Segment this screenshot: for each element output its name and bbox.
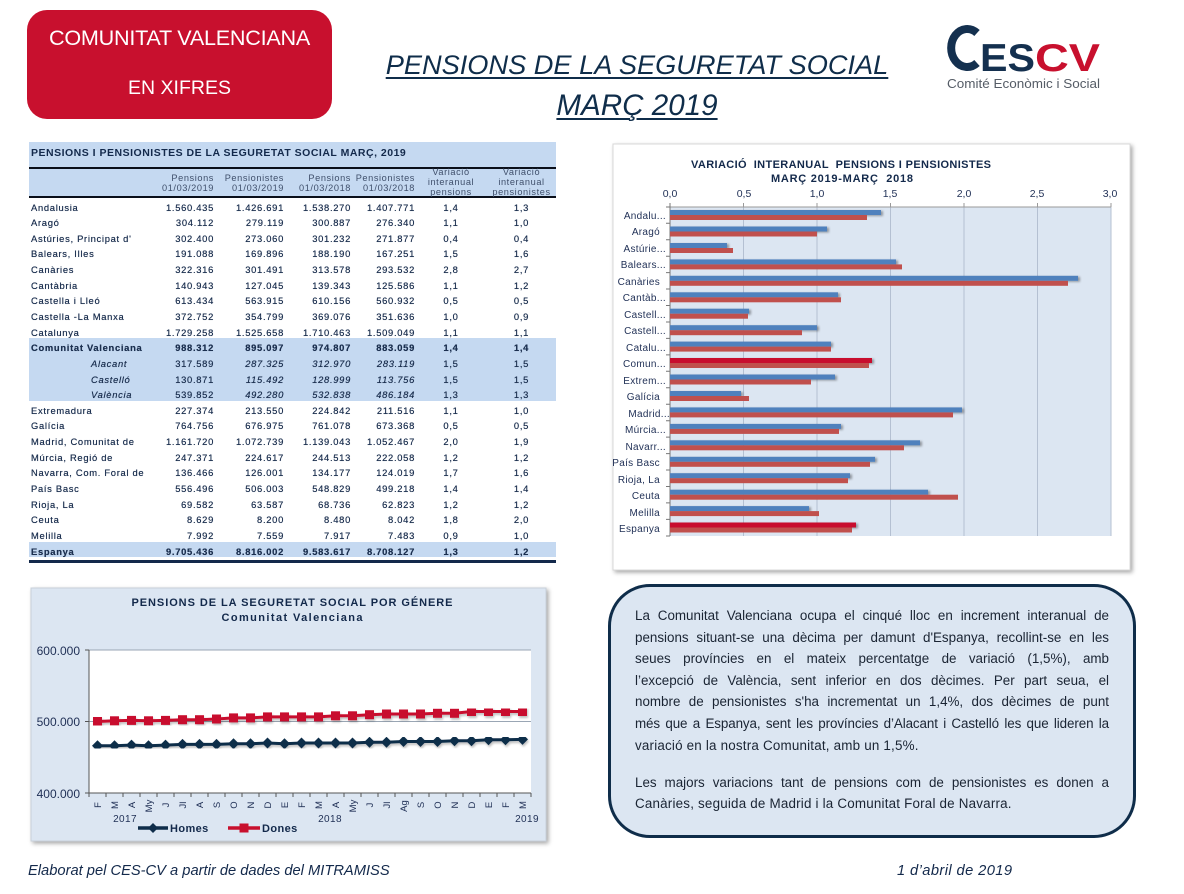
table body: 0,4 <box>514 233 529 244</box>
text: 01/03/2018 <box>363 183 415 193</box>
table body: 1,4 <box>514 342 529 353</box>
text panel: commentary: més que a Espanya, sent les províncies d’Alacant i Castelló les que lideren la <box>635 716 1109 731</box>
table body: 62.823 <box>382 499 415 510</box>
table body: 895.097 <box>245 342 284 353</box>
text panel: commentary <box>608 584 1136 838</box>
text: 01/03/2019 <box>162 183 214 193</box>
table body: 761.078 <box>312 420 351 431</box>
table body: 486.184 <box>376 389 415 400</box>
table body: 287.325 <box>245 358 284 369</box>
text panel: commentary: Canàries, seguida de Madrid i la Comunitat Foral de Navarra. <box>635 796 1012 811</box>
table body: 7.917 <box>324 530 351 541</box>
table body: 1,1 <box>514 327 529 338</box>
text panel: commentary: seues províncies en el mateix percentatge de variació (1,5%), amb <box>635 651 1109 666</box>
table body: 169.896 <box>245 248 284 259</box>
bar chart category labels: Espanya <box>619 524 660 535</box>
table body: 1.139.043 <box>303 436 351 447</box>
table body: 127.045 <box>245 280 284 291</box>
table body: 247.371 <box>175 452 214 463</box>
bar chart category labels: Ceuta <box>632 491 660 502</box>
line chart month labels <box>93 799 529 812</box>
line chart month labels: F <box>501 802 512 808</box>
column headers <box>162 167 551 197</box>
bar chart category labels: Cantàb... <box>623 293 666 304</box>
line chart month labels: M <box>110 801 121 809</box>
table body: 539.852 <box>175 389 214 400</box>
line chart frame <box>31 588 546 841</box>
table body: 0,5 <box>443 295 459 306</box>
line chart plot area <box>85 650 531 797</box>
bar chart title: MARÇ 2019-MARÇ 2018 <box>771 173 913 185</box>
table body: 63.587 <box>251 499 284 510</box>
table body: Castelló <box>91 374 130 385</box>
table body: 293.532 <box>376 264 415 275</box>
table title band <box>29 142 556 167</box>
table body: 222.058 <box>376 452 415 463</box>
text panel: commentary: nombre de pensionistes s'ha incrementat un 1,4%, dos dècimes de punt <box>635 694 1109 709</box>
table body: 1,2 <box>514 546 529 557</box>
table body: 1.407.771 <box>367 202 415 212</box>
bar chart category labels: Melilla <box>630 508 660 519</box>
table body: 1,3 <box>514 389 529 400</box>
table body: 1.052.467 <box>367 436 415 447</box>
line chart month labels: D <box>467 801 478 808</box>
table body: 1,9 <box>514 436 529 447</box>
line chart month labels: N <box>246 801 257 808</box>
bar chart x axis labels: 1,5 <box>883 188 897 200</box>
table body: 317.589 <box>175 358 214 369</box>
line chart y axis labels: 500.000 <box>37 715 80 729</box>
line chart month labels: D <box>263 801 274 808</box>
logo: CESCV: CV <box>1035 37 1100 80</box>
table body: 273.060 <box>245 233 284 244</box>
table body: 499.218 <box>376 483 415 494</box>
table body: 2,0 <box>443 436 459 447</box>
table body: 1,5 <box>443 374 459 385</box>
table body: 191.088 <box>175 248 214 259</box>
table body: 301.232 <box>312 233 351 244</box>
table body: 68.736 <box>318 499 351 510</box>
table body: 372.752 <box>175 311 214 322</box>
table body: 974.807 <box>312 342 351 353</box>
table body: 351.636 <box>376 311 415 322</box>
bar chart x axis labels: 0,0 <box>663 188 677 200</box>
bar chart category labels: Andalu... <box>624 211 666 222</box>
table body: 548.829 <box>312 483 351 494</box>
table body: 224.617 <box>245 452 284 463</box>
bar chart category labels: Castell... <box>624 326 666 337</box>
table body: 128.999 <box>312 374 351 385</box>
footer: date: 1 d’abril de 2019 <box>897 863 1012 879</box>
panel: line chart <box>31 588 546 841</box>
table body: 276.340 <box>376 217 415 228</box>
table body: 1,5 <box>514 374 529 385</box>
line chart month labels: F <box>297 802 308 808</box>
table body: Ceuta <box>31 514 60 525</box>
table body: 8.200 <box>257 514 284 525</box>
bar chart x axis labels: 2,0 <box>957 188 971 200</box>
line series: Homes <box>98 739 522 746</box>
line chart title <box>132 596 452 624</box>
line chart month labels: M <box>518 801 529 809</box>
bar chart category labels: Castell... <box>624 310 666 321</box>
table body: 130.871 <box>175 374 214 385</box>
line chart title: PENSIONS DE LA SEGURETAT SOCIAL POR GÉNERE <box>132 596 452 609</box>
table body: 7.992 <box>187 530 214 541</box>
table body: Espanya <box>31 546 74 557</box>
bar chart plot area <box>666 203 1111 536</box>
line chart month labels: M <box>314 801 325 809</box>
table body: 1.072.739 <box>236 436 284 447</box>
table body: 113.756 <box>377 374 415 385</box>
table body: 2,7 <box>514 264 529 275</box>
bar chart category labels: Múrcia... <box>625 425 666 436</box>
table body: 1,2 <box>443 499 459 510</box>
line series: Dones <box>98 712 522 722</box>
table body: 8.816.002 <box>236 546 284 557</box>
table body: Comunitat Valenciana <box>31 342 142 353</box>
title: PENSIONS DE LA SEGURETAT SOCIAL <box>386 49 888 80</box>
table body: 354.799 <box>245 311 284 322</box>
table body: 134.177 <box>312 467 351 478</box>
table body: 8.042 <box>388 514 415 525</box>
table body: Rioja, La <box>31 499 74 510</box>
table body: 1.161.720 <box>166 436 214 447</box>
table body: 1,0 <box>514 405 529 416</box>
bar chart title <box>691 158 991 185</box>
legend: Dones <box>228 823 298 835</box>
table body: 188.190 <box>312 248 351 259</box>
line chart month labels: S <box>416 802 427 808</box>
line chart year labels: 2019 <box>515 814 539 825</box>
bar chart category labels: Catalu... <box>626 343 666 354</box>
table body: Extremadura <box>31 405 92 416</box>
table body: 312.970 <box>312 358 351 369</box>
table body: 1.509.049 <box>367 327 415 338</box>
table body: 1,4 <box>443 342 459 353</box>
table body: 126.001 <box>245 467 284 478</box>
text: Pensions <box>308 173 351 183</box>
table body: 1.560.435 <box>166 202 214 212</box>
text: Variació <box>503 167 540 177</box>
table body: 1.710.463 <box>303 327 351 338</box>
table body: 300.887 <box>312 217 351 228</box>
bar chart x axis labels <box>663 188 1117 200</box>
table body: País Basc <box>31 483 80 494</box>
line chart y axis labels: 400.000 <box>37 787 80 801</box>
line chart month labels: Jl <box>178 802 189 808</box>
table body: 1,3 <box>514 202 529 212</box>
line chart month labels: My <box>144 799 155 812</box>
line chart y axis labels: 600.000 <box>37 644 80 658</box>
line chart month labels: A <box>331 801 342 808</box>
table body: 227.374 <box>175 405 214 416</box>
table body: Alacant <box>91 358 127 369</box>
table body: 1.426.691 <box>236 202 284 212</box>
table body: Andalusia <box>31 202 78 212</box>
table body: 1,0 <box>514 530 529 541</box>
text: Pensionistes <box>225 173 284 183</box>
table body: 610.156 <box>312 295 351 306</box>
table body: 322.316 <box>175 264 214 275</box>
table body: 1,3 <box>443 389 459 400</box>
line chart year labels: 2017 <box>113 814 137 825</box>
bar chart category labels: Galícia <box>627 392 660 403</box>
line chart month labels: F <box>93 802 104 808</box>
table body: 1,2 <box>514 452 529 463</box>
bar chart category labels: Comun... <box>623 359 666 370</box>
table body: 304.112 <box>176 217 214 228</box>
table body: 8.629 <box>187 514 214 525</box>
table body: 0,5 <box>514 420 529 431</box>
table body: 8.708.127 <box>367 546 415 557</box>
line chart month labels: O <box>229 801 240 809</box>
text: 01/03/2018 <box>299 183 351 193</box>
line chart month labels: N <box>450 801 461 808</box>
legend: Homes: Homes <box>170 823 209 835</box>
table body: 125.586 <box>376 280 415 291</box>
bar chart title: VARIACIÓ INTERANUAL PENSIONS I PENSIONISTES <box>691 158 991 171</box>
table body: 1,7 <box>443 467 459 478</box>
table body: 313.578 <box>312 264 351 275</box>
text: 01/03/2019 <box>232 183 284 193</box>
table body: 1.525.658 <box>236 327 284 338</box>
table body: 532.838 <box>312 389 351 400</box>
bar chart category labels: País Basc <box>612 458 660 469</box>
table body: 224.842 <box>312 405 351 416</box>
bar chart category labels: Astúrie... <box>624 244 666 255</box>
line chart title: Comunitat Valenciana <box>222 612 363 624</box>
line chart month labels: J <box>365 802 376 807</box>
table body: Castella i Lleó <box>31 295 100 306</box>
table body: Madrid, Comunitat de <box>31 436 135 447</box>
table body: Múrcia, Regió de <box>31 452 113 463</box>
table body: València <box>91 389 132 400</box>
table body: Melilla <box>31 530 62 541</box>
text: interanual <box>498 177 545 187</box>
text panel: commentary: La Comunitat Valenciana ocupa el cinqué lloc en increment interanual de <box>635 608 1109 623</box>
table body: Canàries <box>31 264 74 275</box>
table body: 7.483 <box>388 530 415 541</box>
table body: 0,5 <box>443 420 459 431</box>
table body: 369.076 <box>312 311 351 322</box>
bar chart frame <box>613 144 1130 570</box>
table body: 167.251 <box>376 248 415 259</box>
table body: 676.975 <box>245 420 284 431</box>
table body: 613.434 <box>175 295 214 306</box>
table body: 115.492 <box>246 374 284 385</box>
text: interanual <box>428 177 474 187</box>
table body: 302.400 <box>175 233 214 244</box>
table body: 1,8 <box>443 514 459 525</box>
badge: Comunitat Valenciana en xifres: EN XIFRES <box>128 77 231 99</box>
text panel: commentary: variació en la nostra Comunitat, amb un 1,5%. <box>635 738 919 753</box>
line chart month labels: J <box>161 802 172 807</box>
logo: CESCV: ES <box>980 37 1035 80</box>
legend: Dones: Dones <box>262 823 298 835</box>
bar chart category labels: Madrid... <box>628 409 670 420</box>
table body: 0,5 <box>514 295 529 306</box>
table body: 1,3 <box>443 546 459 557</box>
bar chart category labels: Navarr... <box>626 442 666 453</box>
text: pensionistes <box>492 187 551 197</box>
table body: 8.480 <box>324 514 351 525</box>
table body: 244.513 <box>312 452 351 463</box>
table body: 69.582 <box>181 499 214 510</box>
bar chart category labels <box>612 211 670 535</box>
logo: CESCV: Comité Econòmic i Social <box>947 77 1100 91</box>
table body: 0,9 <box>514 311 529 322</box>
table body <box>29 202 556 558</box>
bar chart series: pensions (blue) <box>670 210 1078 528</box>
table body: 1,1 <box>443 217 459 228</box>
line chart month labels: E <box>484 802 495 808</box>
text: Pensions <box>171 173 214 183</box>
table body: 1,1 <box>443 405 459 416</box>
line chart month labels: E <box>280 802 291 808</box>
table body: 673.368 <box>376 420 415 431</box>
table body: Castella -La Manxa <box>31 311 124 322</box>
badge: Comunitat Valenciana en xifres <box>27 10 332 119</box>
table body: 124.019 <box>376 467 415 478</box>
legend: Homes <box>138 823 209 835</box>
table body: Astúries, Principat d' <box>31 233 132 244</box>
bar chart category labels: Extrem... <box>623 376 666 387</box>
bar chart x axis labels: 3,0 <box>1103 188 1117 200</box>
table body: 283.119 <box>377 358 415 369</box>
text: Pensionistes <box>356 173 415 183</box>
table body: 556.496 <box>175 483 214 494</box>
table body: 1,4 <box>443 202 459 212</box>
table body: 1,2 <box>443 452 459 463</box>
line chart month labels: S <box>212 802 223 808</box>
line chart y axis labels <box>37 644 80 801</box>
line chart year labels <box>113 814 539 825</box>
table body: Aragó <box>31 217 60 228</box>
table body: 9.583.617 <box>303 546 351 557</box>
table body: Galícia <box>31 420 65 431</box>
table body: 0,9 <box>443 530 459 541</box>
bar chart category labels: Balears... <box>621 260 666 271</box>
table body: 2,0 <box>514 514 529 525</box>
table body: 1,5 <box>443 248 459 259</box>
table body: Cantàbria <box>31 280 78 291</box>
text panel: commentary: pensions situant-se una dècima per damunt d'Espanya, recollint-se en les <box>635 630 1109 645</box>
table body: 1,1 <box>443 327 459 338</box>
footer: source: Elaborat pel CES-CV a partir de dades del MITRAMISS <box>28 863 390 879</box>
text panel: commentary: Les majors variacions tant de pensions com de pensionistes es donen a <box>635 775 1109 790</box>
table body: 140.943 <box>175 280 214 291</box>
table body: 136.466 <box>175 467 214 478</box>
table body: 279.119 <box>246 217 284 228</box>
table body: 301.491 <box>245 264 284 275</box>
table body: 764.756 <box>175 420 214 431</box>
line chart year labels: 2018 <box>318 814 342 825</box>
table body: 271.877 <box>376 233 415 244</box>
logo: CESCV <box>947 25 1100 91</box>
table body: 1.538.270 <box>303 202 351 212</box>
table body: 883.059 <box>376 342 415 353</box>
text: pensions <box>430 187 472 197</box>
table body: 9.705.436 <box>166 546 214 557</box>
bar chart x axis labels: 2,5 <box>1030 188 1044 200</box>
bar chart series: pensionists (red) <box>670 215 1068 532</box>
table body: 1,4 <box>514 483 529 494</box>
bar chart x axis labels: 1,0 <box>810 188 824 200</box>
table body: 7.559 <box>257 530 284 541</box>
table title band: PENSIONS I PENSIONISTES DE LA SEGURETAT SOCIAL MARÇ, 2019 <box>31 147 406 159</box>
line chart month labels: A <box>127 801 138 808</box>
table body: 1,4 <box>443 483 459 494</box>
table bottom rule <box>29 560 556 563</box>
table body: 1,1 <box>443 280 459 291</box>
line chart month labels: Ag <box>399 800 410 812</box>
table body: 1,0 <box>514 217 529 228</box>
table body: 1,6 <box>514 467 529 478</box>
panel: pensions table <box>29 142 556 563</box>
bar chart category labels: Aragó <box>632 227 660 238</box>
title <box>386 49 888 122</box>
table body: Catalunya <box>31 327 80 338</box>
table body: 1,0 <box>443 311 459 322</box>
table body: 506.003 <box>245 483 284 494</box>
table body: 1,2 <box>514 280 529 291</box>
bar chart category labels: Canàries <box>618 277 660 288</box>
table body: 560.932 <box>376 295 415 306</box>
table body: 563.915 <box>245 295 284 306</box>
table body: 988.312 <box>175 342 214 353</box>
table body: 1,2 <box>514 499 529 510</box>
bar chart category labels: Rioja, La <box>618 475 660 486</box>
text: Variació <box>432 167 470 177</box>
table body: 2,8 <box>443 264 459 275</box>
table body: 211.516 <box>377 405 415 416</box>
line chart month labels: Jl <box>382 802 393 808</box>
table body: 213.550 <box>245 405 284 416</box>
badge: Comunitat Valenciana en xifres: COMUNITAT VALENCIANA <box>49 25 310 50</box>
table body: 139.343 <box>312 280 351 291</box>
table body: 1,5 <box>514 358 529 369</box>
table body: Navarra, Com. Foral de <box>31 467 144 478</box>
bar chart x axis labels: 0,5 <box>737 188 751 200</box>
table body: 492.280 <box>245 389 284 400</box>
line chart month labels: My <box>348 799 359 812</box>
table body: 1,6 <box>514 248 529 259</box>
title: MARÇ 2019 <box>556 89 718 122</box>
table header band <box>29 167 556 198</box>
text panel: commentary: l’excepció de València, sent inferior en dos dècimes. Per part seua, el <box>635 673 1109 688</box>
table body: 1.729.258 <box>166 327 214 338</box>
table body: 1,5 <box>443 358 459 369</box>
line chart month labels: O <box>433 801 444 809</box>
table body: Balears, Illes <box>31 248 94 259</box>
table body: 0,4 <box>443 233 459 244</box>
line chart month labels: A <box>195 801 206 808</box>
